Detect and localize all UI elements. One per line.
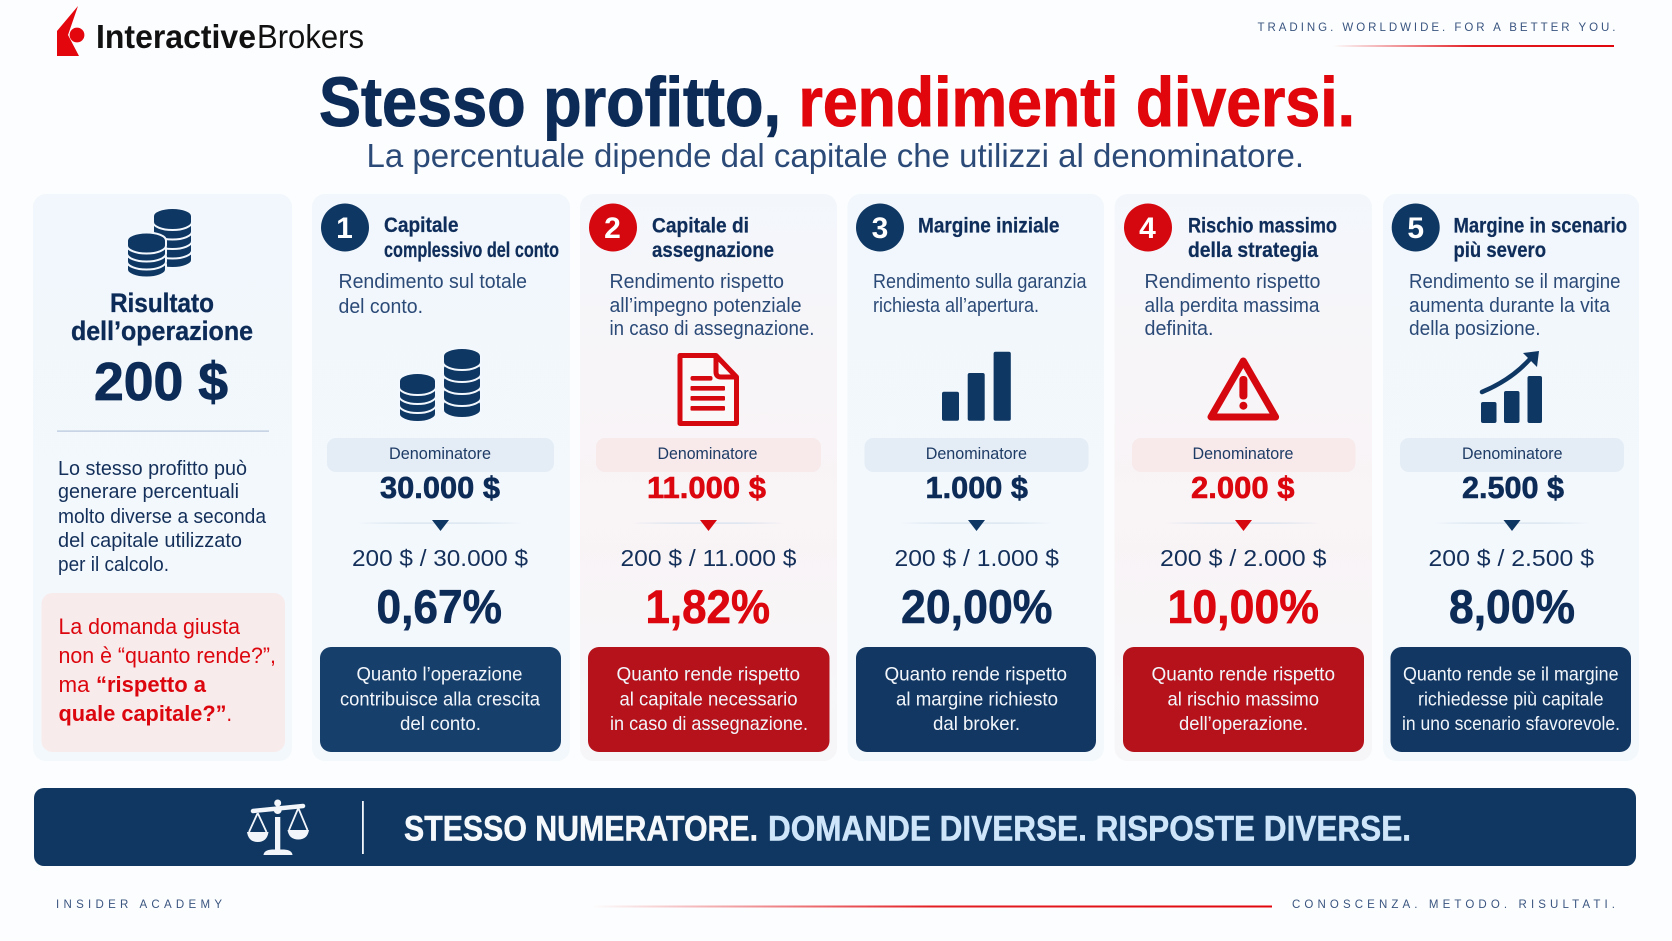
explanation box: al rischio massimo [1168,688,1319,710]
number badge 4 [1124,204,1172,252]
description: Rendimento sulla garanzia [873,271,1087,293]
denominator label [327,438,554,472]
explanation box [1123,647,1364,752]
arrow down [1166,520,1320,531]
explanation box: richiedesse più capitale [1418,688,1604,710]
description: Rendimento se il margine [1409,271,1620,293]
card title: assegnazione [652,238,774,262]
arrow down [1434,520,1589,531]
card title: Capitale [384,213,459,237]
panel: card 5 margine in scenario piu severo [1383,194,1639,761]
callout: La domanda giusta [58,614,240,639]
card title [1188,214,1337,262]
denominator label: Denominatore [1462,445,1562,463]
heading: dell’operazione [71,316,253,346]
denominator value: 2.000 $ [1191,470,1294,505]
card background [848,194,1104,761]
explanation box: al capitale necessario [620,688,798,710]
description: del conto. [338,296,423,318]
number badge 1 [321,204,369,252]
body text: per il calcolo. [58,553,169,576]
explanation box: in uno scenario sfavorevole. [1402,713,1620,735]
subtitle: La percentuale dipende dal capitale che utilizzi al denominatore. [366,137,1304,174]
card background [1114,194,1372,761]
logo wordmark: Interactive [96,18,256,55]
explanation box: in caso di assegnazione. [610,713,808,735]
denominator label: Denominatore [1192,445,1294,463]
percentage: 10,00% [1168,580,1319,633]
explanation box: Quanto rende rispetto [884,664,1067,686]
formula: 200 $ / 2.000 $ [1160,545,1326,571]
body text [58,457,267,576]
icon: warning [1211,361,1276,417]
denominator label: Denominatore [926,445,1027,463]
number badge 5: 5 [1407,212,1424,245]
icon: coins [399,348,481,422]
amount: 200 $ [94,352,228,412]
explanation box: Quanto rende se il margine [1403,664,1618,686]
description: Rendimento sul totale [338,271,527,293]
callout: quale capitale?” [58,701,226,726]
callout: ma [58,672,90,697]
denominator label: Denominatore [389,445,491,463]
card title: Margine iniziale [918,214,1060,238]
card title [384,213,559,262]
percentage: 1,82% [646,580,770,633]
explanation box [588,647,830,752]
description: in caso di assegnazione. [610,318,814,340]
description: richiesta all’apertura. [873,295,1039,317]
number badge 2 [589,204,637,252]
banner text: STESSO NUMERATORE. [404,810,758,848]
description: alla perdita massima [1144,295,1320,317]
explanation box [320,647,561,752]
explanation box: Quanto l’operazione [356,664,522,686]
description [1144,271,1320,340]
number badge 3 [856,204,904,252]
denominator value: 30.000 $ [380,470,500,505]
description [1409,271,1620,340]
body text: molto diverse a seconda [58,505,267,528]
description [338,271,527,318]
formula: 200 $ / 2.500 $ [1428,545,1594,571]
tagline top right: TRADING. WORLDWIDE. FOR A BETTER YOU. [1258,22,1616,34]
card title: Rischio massimo [1188,214,1337,238]
title: Stesso profitto, [319,63,781,141]
icon: scales [247,800,309,855]
explanation box: dell’operazione. [1179,713,1308,735]
body text: del capitale utilizzato [58,529,242,552]
denominator label [596,438,821,472]
denominator value: 1.000 $ [926,470,1028,505]
panel: card 2 capitale di assegnazione [580,194,837,761]
explanation box: contribuisce alla crescita [340,688,540,710]
denominator value: 11.000 $ [647,470,766,505]
icon: coins [127,208,192,278]
description: definita. [1144,318,1214,340]
arrow down [632,520,784,531]
logo wordmark [96,18,364,55]
percentage: 0,67% [376,580,502,633]
denominator value: 2.500 $ [1462,470,1564,505]
description: aumenta durante la vita [1409,295,1611,317]
denominator label [1400,438,1624,472]
heading [71,288,253,346]
callout: non è “quanto rende?”, [58,643,276,668]
banner background [34,788,1636,866]
body text: Lo stesso profitto può [58,457,247,480]
number badge 4: 4 [1139,212,1156,245]
icon: bar chart [942,352,1011,421]
explanation box: del conto. [400,713,481,735]
description [873,271,1087,317]
formula: 200 $ / 30.000 $ [352,545,528,571]
banner text [404,810,1411,848]
card title: complessivo del conto [384,238,559,262]
description: all’impegno potenziale [610,295,802,317]
denominator label [864,438,1088,472]
card title: della strategia [1188,238,1319,262]
explanation box: al margine richiesto [896,688,1058,710]
formula: 200 $ / 1.000 $ [894,545,1059,571]
number badge 5 [1392,204,1440,252]
card title: Capitale di [652,214,749,238]
footer left: INSIDER ACADEMY [56,899,222,911]
icon: document [680,356,736,424]
icon: logo flame [57,6,84,56]
number badge 2: 2 [604,212,621,245]
callout: . [226,701,232,726]
number badge 1: 1 [336,212,353,245]
icon: growth chart [1481,351,1542,423]
card background [312,194,570,761]
arrow down [358,520,522,531]
explanation box [856,647,1096,752]
number badge 3: 3 [872,212,888,245]
footer rule [592,906,1272,908]
panel: card 1 capitale complessivo [312,194,570,761]
logo: Interactive Brokers [57,6,364,56]
title [319,63,1355,141]
panel background [33,194,292,761]
card title [1454,214,1627,262]
denominator label [1132,438,1356,472]
panel: risultato dell'operazione [33,194,292,761]
denominator label: Denominatore [658,445,758,463]
body text: generare percentuali [58,480,239,503]
formula: 200 $ / 11.000 $ [620,545,796,571]
description [610,271,814,340]
explanation box: Quanto rende rispetto [616,664,800,686]
card title [652,214,774,262]
heading: Risultato [110,288,214,318]
panel: card 3 margine iniziale [848,194,1104,761]
explanation box: dal broker. [933,713,1020,735]
title: rendimenti diversi. [798,63,1355,141]
explanation box: Quanto rende rispetto [1152,664,1335,686]
panel: card 4 rischio massimo [1114,194,1372,761]
callout [42,593,285,752]
banner [34,788,1636,866]
explanation box [1390,647,1631,752]
card background [580,194,837,761]
description: Rendimento rispetto [610,271,784,293]
callout: “rispetto a [96,672,206,697]
percentage: 8,00% [1449,580,1575,633]
arrow down [901,520,1052,531]
card title: Margine in scenario [1454,214,1627,238]
logo wordmark: Brokers [257,18,364,55]
banner text: DOMANDE DIVERSE. RISPOSTE DIVERSE. [768,810,1411,848]
description: della posizione. [1409,318,1540,340]
percentage: 20,00% [901,580,1052,633]
card background [1383,194,1639,761]
description: Rendimento rispetto [1144,271,1320,293]
card title: più severo [1454,238,1546,262]
footer right: CONOSCENZA. METODO. RISULTATI. [1292,899,1615,911]
